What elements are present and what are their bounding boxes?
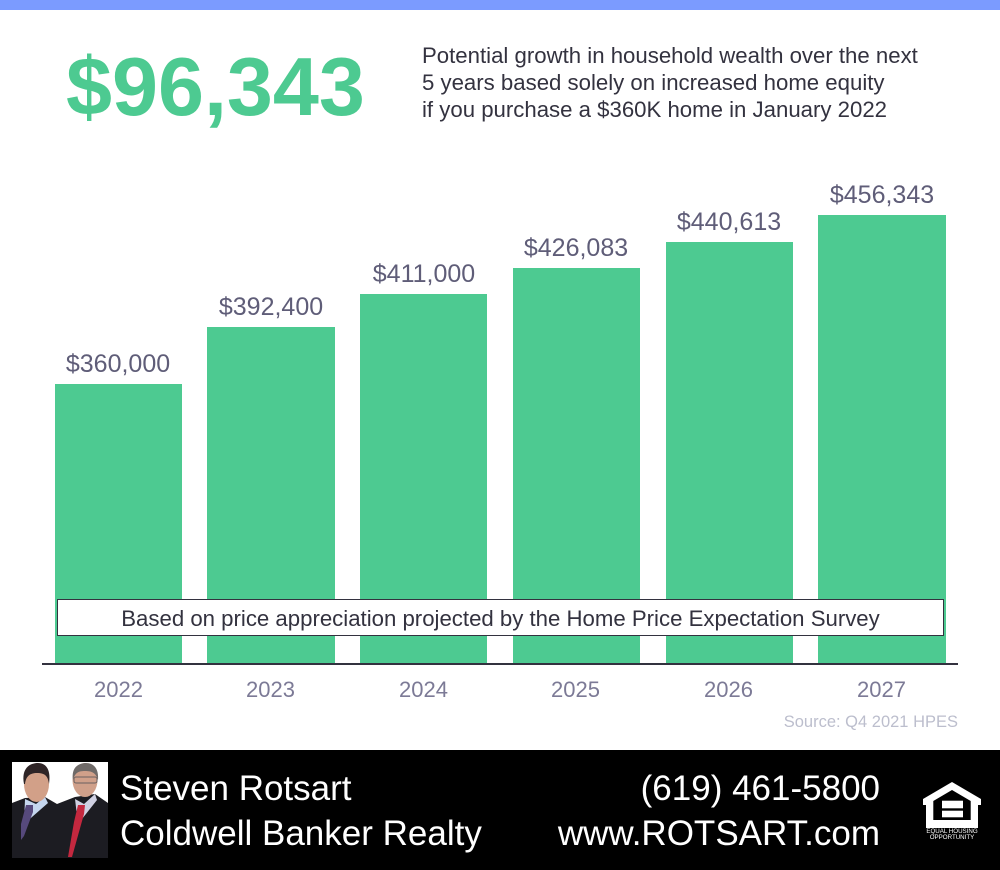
- description text: if you purchase a $360K home in January 2022: [422, 97, 887, 122]
- icon: equal housing opportunity: [923, 782, 981, 840]
- bar 2023: [207, 327, 335, 664]
- year label 2024: 2024: [399, 677, 448, 702]
- value label 2026: $440,613: [677, 208, 781, 236]
- agent photo: [12, 762, 108, 858]
- year label 2023: 2023: [246, 677, 295, 702]
- bar 2025: [513, 268, 640, 664]
- description text: 5 years based solely on increased home equity: [422, 70, 885, 95]
- bar 2027: [818, 215, 946, 664]
- website: www.ROTSART.com: [558, 814, 880, 853]
- logo caption: EQUAL HOUSING: [926, 828, 978, 835]
- logo caption: OPPORTUNITY: [930, 834, 974, 840]
- year label 2027: 2027: [857, 677, 906, 702]
- agent name: Steven Rotsart: [120, 769, 352, 808]
- value label 2022: $360,000: [66, 350, 170, 378]
- year label 2022: 2022: [94, 677, 143, 702]
- brokerage name: Coldwell Banker Realty: [120, 814, 482, 853]
- baseline axis: [42, 663, 958, 665]
- bar chart: [42, 181, 958, 702]
- bar 2024: [360, 294, 487, 664]
- description text: Potential growth in household wealth over the next: [422, 43, 918, 68]
- year label 2025: 2025: [551, 677, 600, 702]
- logo caption: [926, 828, 978, 840]
- value label 2025: $426,083: [524, 234, 628, 262]
- value label 2024: $411,000: [373, 260, 475, 288]
- headline figure: $96,343: [66, 40, 365, 133]
- year label 2026: 2026: [704, 677, 753, 702]
- value label 2023: $392,400: [219, 293, 323, 321]
- value label 2027: $456,343: [830, 181, 934, 209]
- footer band: [0, 750, 1000, 870]
- survey note box: [57, 599, 944, 636]
- bar 2026: [666, 242, 793, 664]
- survey note box: Based on price appreciation projected by the Home Price Expectation Survey: [121, 606, 880, 631]
- top accent band: [0, 0, 1000, 10]
- phone number: (619) 461-5800: [641, 769, 880, 808]
- source note: Source: Q4 2021 HPES: [784, 713, 958, 731]
- bar 2022: [55, 384, 182, 664]
- description text: [422, 43, 918, 122]
